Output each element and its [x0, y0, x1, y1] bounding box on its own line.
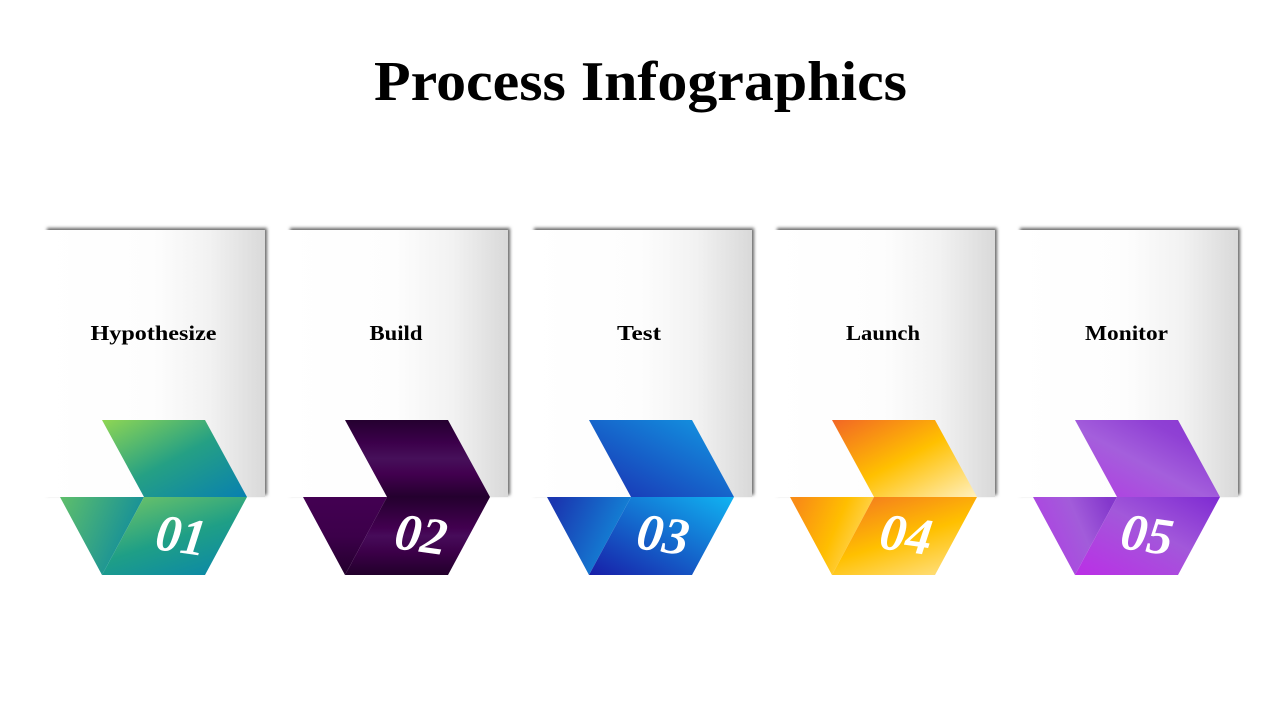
panel: step 5 Monitor	[1016, 228, 1240, 575]
panel: step 4 Launch	[773, 228, 997, 575]
step 1 label: Hypothesize	[90, 321, 216, 345]
step 2 chevron badge: 02	[391, 503, 451, 567]
step 3 chevron badge	[547, 420, 734, 575]
title: Process Infographics	[374, 51, 907, 113]
panel: step 2 Build	[286, 228, 510, 575]
step 5 label: Monitor	[1085, 321, 1168, 345]
step 4 chevron badge: 04	[876, 503, 936, 567]
step 5 chevron badge	[1033, 420, 1220, 575]
step 1 chevron badge: 01	[152, 504, 210, 568]
step 3 chevron badge: 03	[633, 503, 693, 567]
step 4 chevron badge	[790, 420, 977, 575]
step 1 chevron badge	[60, 420, 247, 575]
panel: step 1 Hypothesize	[43, 228, 267, 575]
step 3 label: Test	[617, 321, 661, 345]
panel: step 3 Test	[530, 228, 754, 575]
step 4 label: Launch	[846, 321, 920, 345]
step 2 chevron badge	[303, 420, 490, 575]
step 5 chevron badge: 05	[1117, 503, 1177, 567]
step 2 label: Build	[370, 321, 423, 345]
